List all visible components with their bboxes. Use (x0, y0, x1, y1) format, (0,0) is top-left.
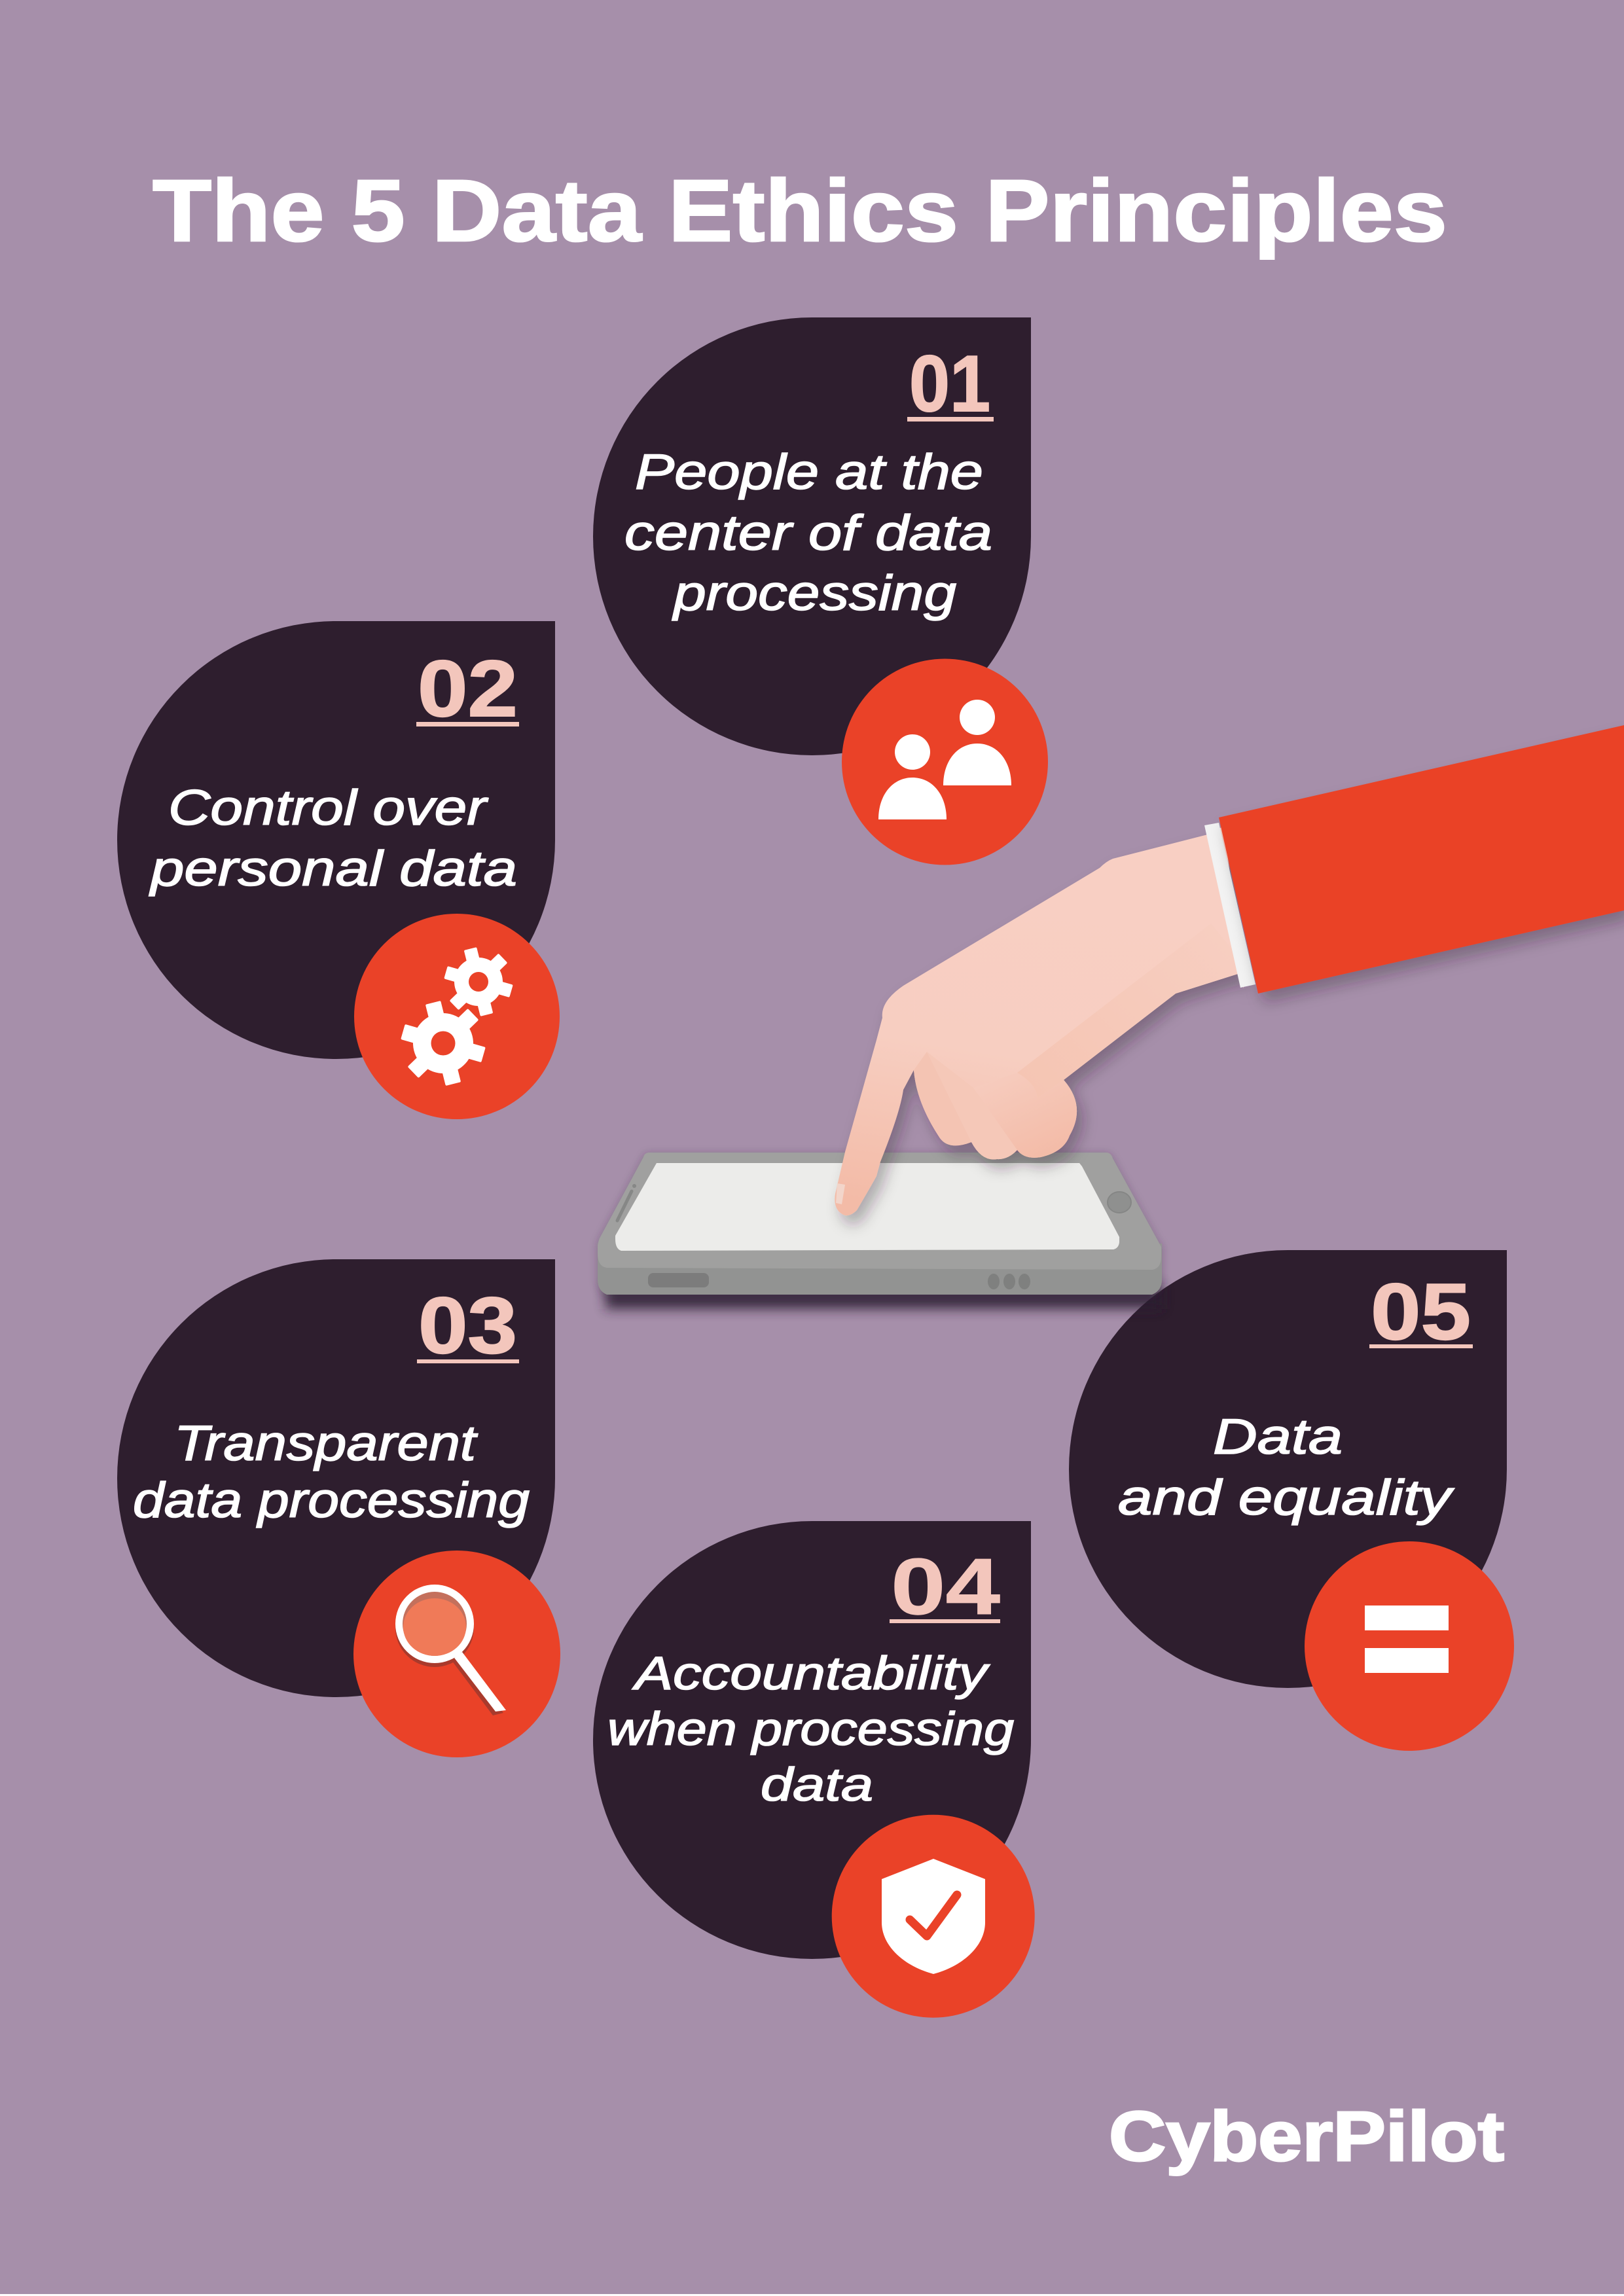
panel: principle 04 (593, 1521, 1035, 2018)
teardrop 03 (117, 1259, 555, 1697)
sleeve (1219, 725, 1624, 994)
teardrop 05 (1069, 1250, 1507, 1688)
panel: principle 05 (1069, 1250, 1514, 1751)
title: The 5 Data Ethics Principles (153, 162, 1447, 260)
hand shape (835, 826, 1244, 1215)
icon: magnifier (353, 1551, 560, 1757)
number 04: 04 (891, 1542, 1000, 1631)
panel: principle 01 (593, 317, 1048, 865)
text 04: data (761, 1759, 873, 1811)
text 05 (1118, 1409, 1454, 1526)
icon: equals (1305, 1541, 1514, 1751)
text 01 (624, 444, 992, 621)
text 04: Accountability (632, 1648, 991, 1700)
text 01: People at the (635, 444, 983, 500)
teardrop 01 (593, 317, 1031, 755)
logo: CyberPilot (1109, 2096, 1504, 2176)
teardrop 02 (117, 621, 555, 1059)
number 05: 05 (1371, 1267, 1471, 1356)
teardrop 04 (593, 1521, 1031, 1959)
hand pressing the screen (835, 725, 1624, 1215)
fingernail (836, 1183, 845, 1204)
text 05: Data (1213, 1409, 1343, 1465)
text 02 (149, 780, 517, 897)
panel: principle 02 (117, 621, 560, 1119)
text 03: data processing (133, 1473, 530, 1528)
number 01: 01 (909, 339, 990, 428)
phone illustration (598, 1153, 1162, 1309)
icon: shield (832, 1815, 1035, 2018)
text 03 (133, 1416, 530, 1528)
text 02: personal data (149, 841, 517, 897)
sleeve cuff (1204, 823, 1255, 988)
text 05: and equality (1118, 1470, 1454, 1526)
text 02: Control over (168, 780, 488, 836)
number 02: 02 (418, 644, 518, 733)
text 04 (607, 1648, 1014, 1811)
text 01: center of data (624, 505, 992, 561)
text 04: when processing (607, 1704, 1014, 1755)
panel: principle 03 (117, 1259, 560, 1757)
text 03: Transparent (174, 1416, 478, 1471)
icon: gears (354, 914, 560, 1119)
number 03: 03 (418, 1281, 517, 1370)
text 01: processing (672, 565, 956, 621)
icon: people (842, 658, 1048, 865)
